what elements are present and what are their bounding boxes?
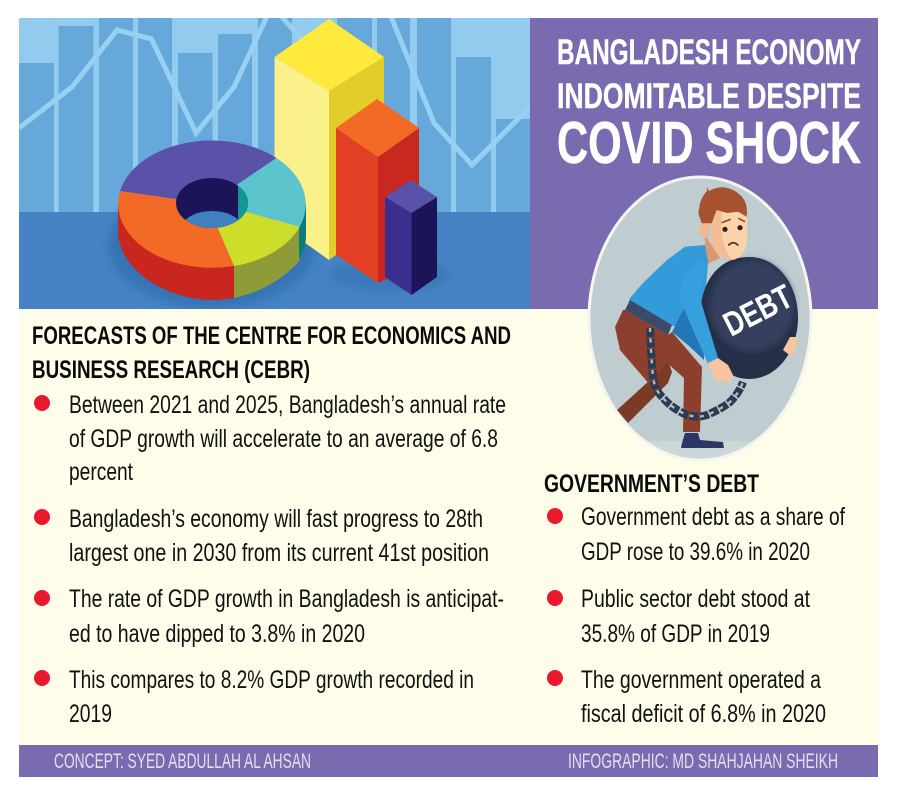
- heading: forecasts: FORECASTS OF THE CENTRE FOR ECONOMICS AND: [32, 322, 511, 350]
- bar: yellow: [274, 19, 384, 260]
- front leg: [615, 310, 702, 432]
- panel: chart illustration: [19, 14, 532, 309]
- bullet: economy ranking: Bangladesh’s economy will fast progress to 28th: [69, 505, 483, 533]
- ball label: DEBT: DEBT: [717, 278, 799, 344]
- bullet list: forecasts: [34, 391, 506, 728]
- bullet: 2019 comparison: This compares to 8.2% GDP growth recorded in: [69, 666, 474, 694]
- shirt: [628, 245, 708, 340]
- bullet: debt share: GDP rose to 39.6% in 2020: [581, 538, 810, 566]
- illustration: man chained to debt ball: [589, 177, 811, 461]
- footer bar: [19, 745, 878, 777]
- bullet: public sector debt: 35.8% of GDP in 2019: [581, 620, 770, 648]
- bullet: growth dip: ed to have dipped to 3.8% in 2020: [69, 620, 365, 648]
- bullet: economy ranking: [34, 505, 489, 567]
- bullet: fiscal deficit: The government operated a: [581, 666, 821, 694]
- panel: cream background: [19, 309, 878, 745]
- donut chart: [118, 140, 306, 300]
- heading: forecasts: [32, 322, 511, 384]
- bullet: public sector debt: Public sector debt stood at: [581, 585, 810, 613]
- bullet: GDP growth average: [34, 391, 506, 486]
- neck and ear: [700, 222, 720, 264]
- bar: navy: [385, 180, 437, 295]
- bar: orange: [336, 99, 419, 283]
- bullet: GDP growth average: of GDP growth will accelerate to an average of 6.8: [69, 425, 498, 453]
- chain: [650, 328, 743, 416]
- debt ball: [700, 257, 798, 379]
- bullet: economy ranking: largest one in 2030 from its current 41st position: [69, 539, 489, 567]
- hands: [708, 337, 797, 382]
- bullet: fiscal deficit: fiscal deficit of 6.8% in 2020: [581, 700, 826, 728]
- bullet: GDP growth average: percent: [69, 458, 133, 486]
- title: [557, 33, 861, 176]
- bullet: public sector debt: [547, 585, 810, 648]
- bullet list: government debt: [547, 503, 845, 728]
- bullet: 2019 comparison: [34, 666, 474, 728]
- back leg: [617, 340, 672, 423]
- bullet: GDP growth average: Between 2021 and 2025, Bangladesh’s annual rate: [69, 391, 506, 419]
- belt: [625, 300, 672, 335]
- bullet: growth dip: [34, 585, 504, 648]
- arm: [680, 258, 718, 364]
- bullet: fiscal deficit: [547, 666, 826, 728]
- bullet: 2019 comparison: 2019: [69, 700, 112, 728]
- bullet: debt share: [547, 503, 845, 566]
- shoe: [681, 433, 724, 448]
- footer bar: CONCEPT: SYED ABDULLAH AL AHSAN: [54, 750, 311, 773]
- shirt shadow: [672, 308, 704, 360]
- panel: purple title background: [530, 18, 878, 309]
- heading: forecasts: BUSINESS RESEARCH (CEBR): [32, 356, 310, 384]
- heading: government's debt: GOVERNMENT’S DEBT: [544, 470, 759, 498]
- hair: [698, 187, 747, 223]
- face: [712, 208, 747, 260]
- bullet: growth dip: The rate of GDP growth in Bangladesh is anticipat-: [69, 585, 504, 613]
